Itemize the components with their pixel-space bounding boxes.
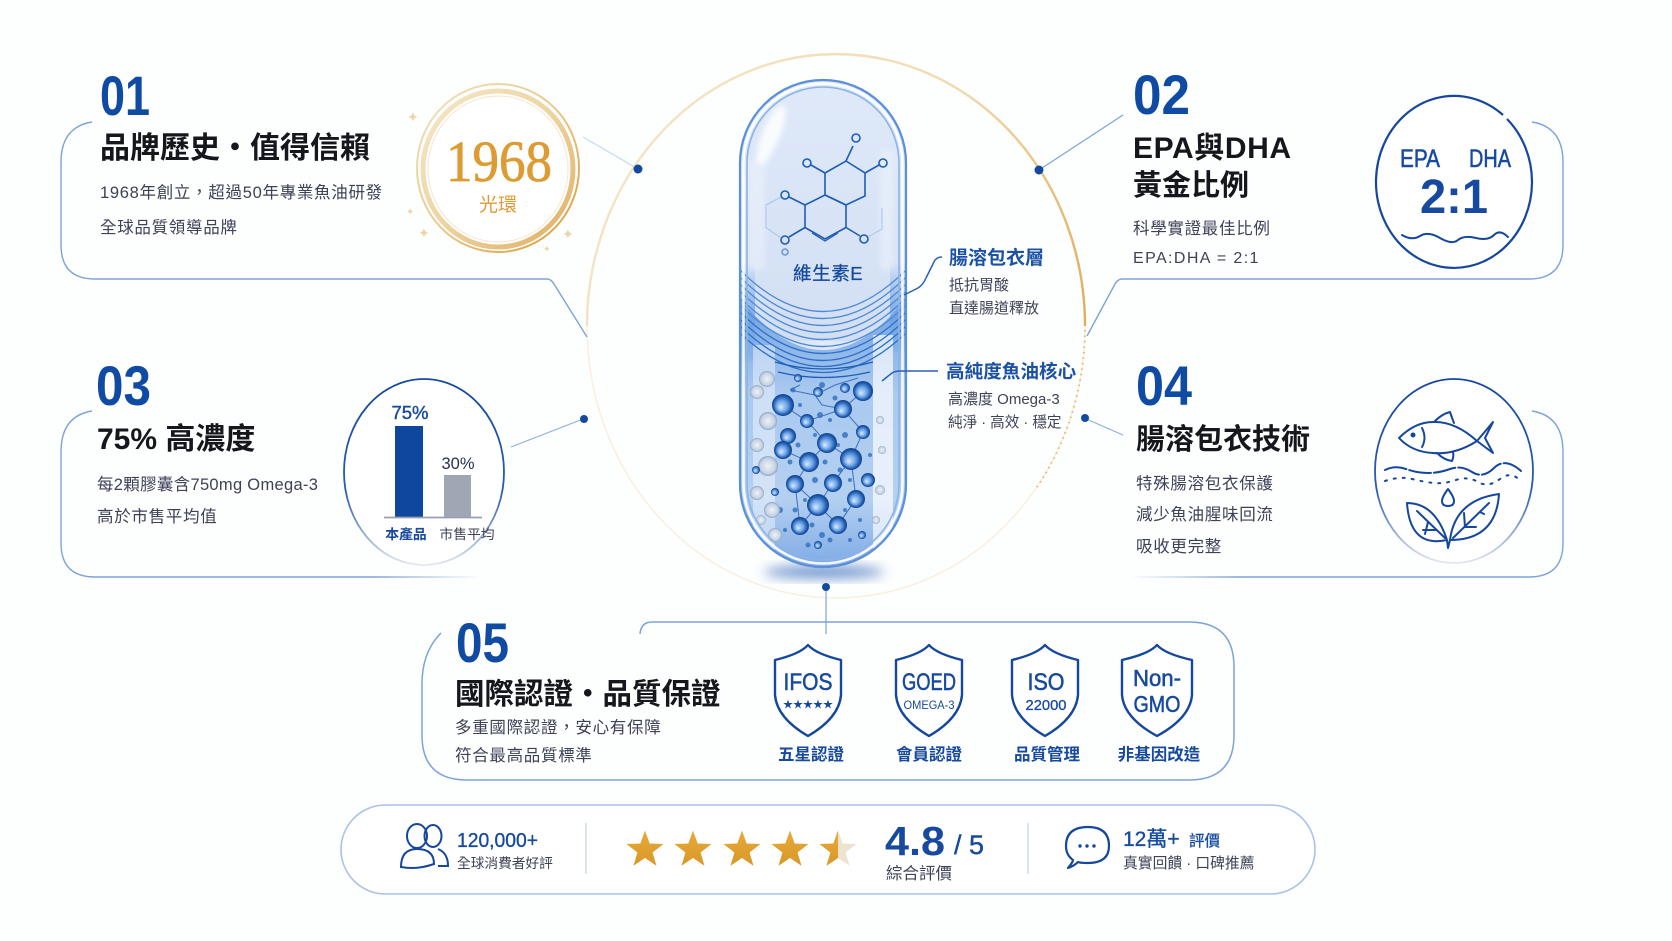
badge: ratio circle: EPA [1400, 145, 1440, 173]
bar chart: 75% [391, 402, 429, 423]
stat: reviews: 真實回饋 · 口碑推薦 [1123, 854, 1255, 872]
description: 高於市售平均值 [97, 507, 217, 526]
bar chart: 市售平均 [439, 526, 495, 542]
panel outline: 01 [61, 122, 587, 337]
number: 01 [100, 64, 150, 127]
badge: 1968 halo [406, 84, 579, 254]
badge: 1968 halo: ✦ [418, 225, 430, 241]
number: 03 [96, 354, 151, 417]
callout: fish oil core: 高濃度 Omega-3 [948, 391, 1060, 408]
description: 特殊腸溶包衣保護 [1136, 474, 1274, 493]
badge: ISO: 品質管理 [1014, 744, 1080, 764]
bar chart [344, 379, 504, 565]
badge: 1968 halo: ✦ [407, 109, 419, 125]
heading: 品牌歷史・值得信賴 [100, 132, 370, 165]
description [97, 475, 318, 526]
description [100, 183, 383, 237]
capsule label: 維生素E [793, 263, 863, 284]
stat: overall score: 4.8 [885, 818, 945, 864]
icon: chat bubble [1066, 827, 1109, 868]
badge: ratio circle: 2:1 [1420, 171, 1488, 224]
description: 每2顆膠囊含750mg Omega-3 [97, 475, 318, 494]
stat: reviews [1123, 828, 1255, 872]
description [1136, 474, 1274, 556]
callout: enteric coating: 腸溶包衣層 [949, 246, 1044, 269]
number: 05 [456, 611, 509, 674]
badge: IFOS [775, 645, 844, 764]
panel: 05 certifications [455, 611, 1201, 765]
bubble network lines [790, 378, 861, 520]
stat: overall score [885, 818, 984, 883]
panel: 01 brand history [100, 64, 579, 254]
panel: 04 enteric coating technology [1136, 354, 1533, 563]
description: 吸收更完整 [1136, 537, 1222, 556]
description [1133, 219, 1271, 267]
description: 減少魚油腥味回流 [1136, 505, 1274, 524]
badge: 1968 halo: 光環 [479, 194, 517, 216]
stat: overall score: 綜合評價 [886, 864, 952, 883]
callout: enteric coating [904, 246, 1044, 317]
bar chart: 30% [441, 455, 475, 473]
icon: five stars [626, 830, 856, 866]
stat: consumers [457, 830, 553, 871]
panel outline: 04 [1130, 411, 1563, 577]
badge: Non-GMO [1118, 645, 1201, 764]
description: EPA:DHA = 2:1 [1133, 250, 1260, 267]
connector: 04 to capsule [1081, 414, 1123, 435]
small droplets [773, 382, 872, 548]
description: 1968年創立，超過50年專業魚油研發 [100, 183, 383, 202]
description: 符合最高品質標準 [455, 746, 593, 765]
icon: users [401, 824, 448, 868]
panel: 03 high concentration [96, 354, 504, 565]
number: 02 [1133, 63, 1190, 126]
badge: 1968 halo: ✦ [562, 226, 574, 242]
badge: ratio circle [1376, 96, 1532, 268]
description: 科學實證最佳比例 [1133, 219, 1271, 238]
callout: fish oil core [882, 361, 1077, 431]
stat: consumers: 全球消費者好評 [457, 856, 553, 871]
heading: EPA與DHA [1133, 132, 1292, 165]
stat: consumers: 120,000+ [457, 830, 538, 852]
callout: fish oil core: 高純度魚油核心 [946, 361, 1077, 382]
connector: 02 to capsule [1034, 115, 1123, 174]
capsule illustration [739, 79, 907, 578]
badge: GOED: OMEGA-3 [904, 698, 955, 712]
bar chart: 本產品 [385, 526, 427, 542]
panel: 02 EPA DHA ratio [1133, 63, 1532, 268]
badge: 1968 halo: 1968 [446, 129, 552, 194]
badge: ISO: ISO [1028, 669, 1064, 696]
heading: 75% 高濃度 [97, 423, 255, 456]
panel outline: 03 [61, 411, 480, 577]
badge: Non-GMO: GMO [1134, 691, 1180, 717]
icon: fish and leaves [1375, 379, 1533, 563]
connector: 01 to capsule [583, 137, 642, 174]
connector: 03 to capsule [511, 415, 588, 447]
badge: IFOS: IFOS [784, 669, 832, 696]
badge: ISO: 22000 [1026, 697, 1066, 714]
panel outline: 05 [422, 622, 1234, 780]
badge: 1968 halo: ✦ [543, 244, 551, 254]
badge: Non-GMO: 非基因改造 [1118, 745, 1201, 764]
description [455, 718, 661, 765]
badge: GOED: GOED [902, 669, 956, 696]
heading: 腸溶包衣技術 [1136, 423, 1310, 456]
panel: rating bar [341, 805, 1315, 894]
heading: 黃金比例 [1133, 169, 1249, 202]
panel: central gold halo ring [587, 54, 1085, 598]
capsule contents [741, 81, 905, 570]
top highlight [755, 105, 787, 165]
number: 04 [1136, 354, 1192, 417]
badge: Non-GMO: Non- [1133, 665, 1181, 691]
description: 多重國際認證，安心有保障 [455, 718, 661, 737]
badge: IFOS: ★★★★★ [783, 700, 833, 711]
heading: 國際認證・品質保證 [455, 678, 721, 711]
stat: reviews: 評價 [1189, 832, 1221, 850]
stat: overall score: / 5 [954, 830, 984, 860]
callout: enteric coating: 抵抗胃酸 [949, 277, 1009, 294]
badge: GOED [896, 645, 962, 764]
badge: IFOS: 五星認證 [778, 744, 844, 764]
pale bubbles [750, 371, 886, 542]
badge: GOED: 會員認證 [896, 744, 962, 764]
blue bubbles [752, 374, 875, 549]
callout: enteric coating: 直達腸道釋放 [949, 300, 1039, 317]
molecule structure [766, 134, 887, 255]
capsule rim [740, 80, 906, 567]
badge: 1968 halo: ✦ [406, 207, 414, 218]
badge: ratio circle: DHA [1469, 145, 1511, 173]
callout: fish oil core: 純淨 · 高效 · 穩定 [948, 414, 1062, 431]
panel outline: 02 [1087, 122, 1563, 336]
description: 全球品質領導品牌 [100, 218, 238, 237]
connector: 05 to capsule [822, 583, 830, 634]
stat: reviews: 12萬+ [1123, 828, 1180, 851]
capsule shadow [764, 566, 884, 578]
badge: ISO [1012, 645, 1080, 764]
heading [1133, 132, 1292, 202]
capsule body [739, 79, 907, 568]
